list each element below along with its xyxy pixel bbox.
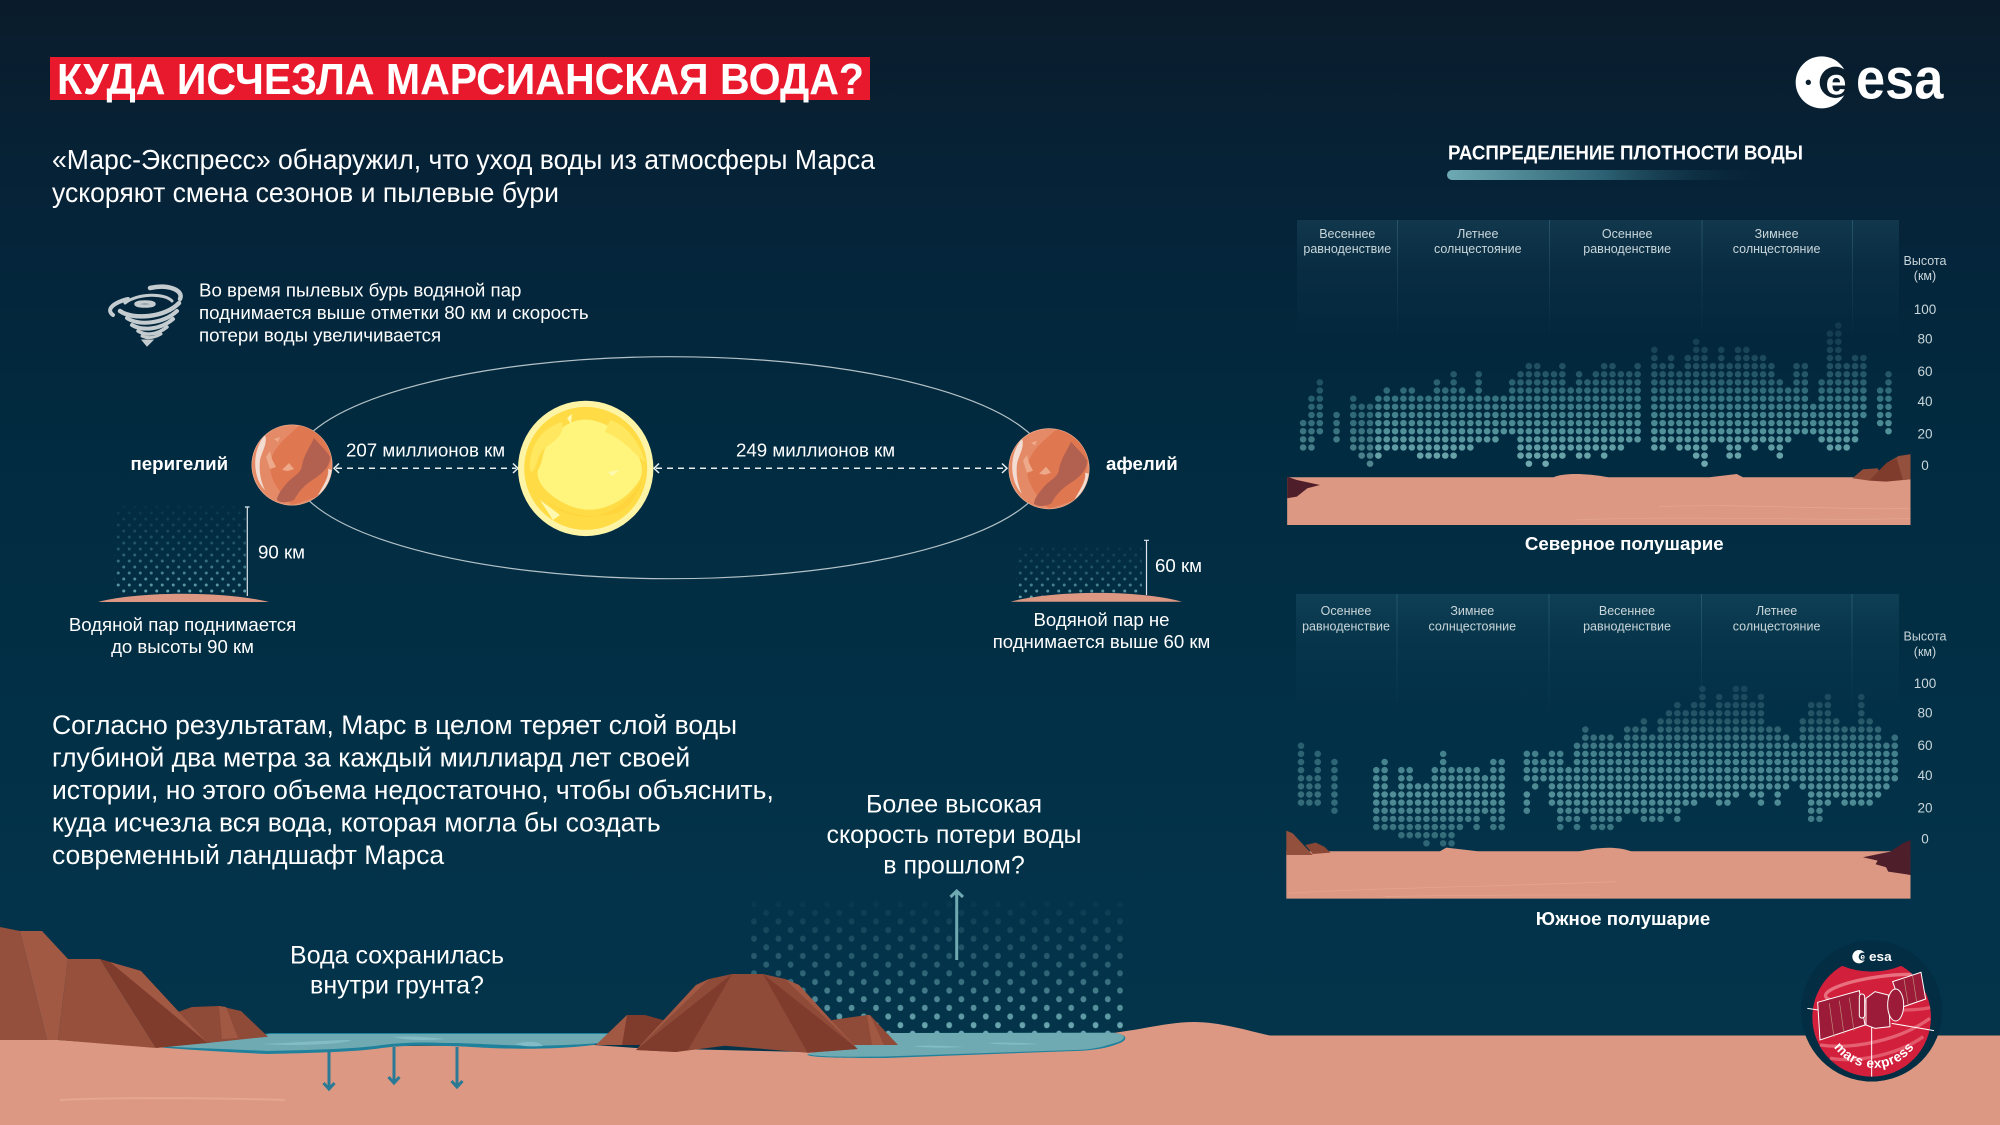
paragraph: куда исчезла вся вода, которая могла бы создать xyxy=(52,808,661,838)
season headers north xyxy=(1297,220,1899,340)
esa logo: esa xyxy=(1856,47,1944,111)
vapour cloud above lake xyxy=(751,910,1123,1034)
icon: dust storm xyxy=(110,287,181,346)
badge esa logo: e xyxy=(1860,952,1865,962)
season headers south xyxy=(1296,594,1899,714)
paragraph: глубиной два метра за каждый миллиард лет своей xyxy=(52,742,690,772)
dot matrix south xyxy=(1301,689,1895,843)
season headers north: Осеннее xyxy=(1602,227,1653,241)
season headers south: Летнее xyxy=(1756,604,1797,618)
badge esa logo: esa xyxy=(1869,950,1893,964)
lake: right xyxy=(807,1033,1125,1058)
chart heading: РАСПРЕДЕЛЕНИЕ ПЛОТНОСТИ ВОДЫ xyxy=(1448,142,1803,164)
storm text: потери воды увеличивается xyxy=(199,324,441,346)
esa logo xyxy=(1796,47,1944,111)
season headers south: солнцестояние xyxy=(1733,620,1820,634)
altitude axis south: 40 xyxy=(1917,768,1933,783)
altitude axis south: (км) xyxy=(1914,645,1936,659)
text: higher loss in the past: в прошлом? xyxy=(883,852,1025,880)
label: 60 km: 60 км xyxy=(1155,555,1202,576)
badge esa logo xyxy=(1852,950,1893,964)
distance label: 249: 249 миллионов км xyxy=(736,440,895,460)
orbit xyxy=(292,357,1048,579)
altitude axis north: 40 xyxy=(1917,394,1933,409)
text: higher loss in the past: скорость потери воды xyxy=(826,821,1082,849)
altitude axis north: 0 xyxy=(1921,458,1929,473)
water vapour: aphelion xyxy=(1011,540,1182,602)
rocks: left cliff xyxy=(0,927,268,1048)
altitude axis south: 20 xyxy=(1917,800,1933,816)
arrow: aphelion distance xyxy=(654,464,1007,473)
altitude axis south: 80 xyxy=(1917,706,1933,720)
surface landscape xyxy=(0,927,2000,1125)
subtitle: ускоряют смена сезонов и пылевые бури xyxy=(52,177,559,208)
distance label: 207: 207 миллионов км xyxy=(346,440,505,460)
text: higher loss in the past: Более высокая xyxy=(866,790,1042,818)
rocks: central mountain xyxy=(596,974,898,1053)
altitude axis north: 80 xyxy=(1917,332,1933,346)
season headers north: Летнее xyxy=(1457,227,1498,241)
text: water stored in ground: Вода сохранилась xyxy=(290,942,504,970)
icon: mars at aphelion xyxy=(1008,428,1090,509)
altitude axis south: 0 xyxy=(1921,832,1929,846)
altitude axis north: (км) xyxy=(1914,269,1936,283)
label south: Южное полушарие xyxy=(1536,908,1710,929)
caption: perihelion vapour: Водяной пар поднимается xyxy=(69,614,296,635)
panel: southern hemisphere chart xyxy=(1286,594,1947,929)
altitude axis north xyxy=(1904,254,1947,473)
chart heading xyxy=(1447,142,1803,180)
season headers south: солнцестояние xyxy=(1428,620,1516,634)
altitude axis south: Высота xyxy=(1904,630,1947,644)
mission badge: mars express xyxy=(1802,942,1942,1082)
altitude axis north: 100 xyxy=(1914,302,1936,317)
arrow: perihelion distance xyxy=(334,464,518,473)
text: water stored in ground: внутри грунта? xyxy=(310,972,484,1000)
altitude axis north: 60 xyxy=(1917,364,1933,379)
season headers north: Весеннее xyxy=(1319,227,1375,241)
altitude axis north: 20 xyxy=(1917,426,1933,442)
season headers south: Осеннее xyxy=(1321,604,1371,618)
season headers south: равноденствие xyxy=(1302,620,1390,634)
spacecraft xyxy=(1807,972,1934,1077)
paragraph: современный ландшафт Марса xyxy=(52,840,444,870)
paragraph: истории, но этого объема недостаточно, чтобы объяснить, xyxy=(52,775,774,805)
water vapour: perihelion xyxy=(98,503,269,602)
season headers south: Весеннее xyxy=(1599,604,1655,618)
caption: aphelion vapour: Водяной пар не xyxy=(1034,609,1169,630)
lake: left xyxy=(156,1033,625,1054)
surface south xyxy=(1286,831,1911,899)
arrows: seepage xyxy=(324,1047,462,1089)
season headers north: равноденствие xyxy=(1583,242,1671,256)
altitude axis south: 60 xyxy=(1917,738,1933,753)
caption: perihelion vapour: до высоты 90 км xyxy=(111,636,254,657)
ground xyxy=(0,1022,2000,1125)
season headers north: солнцестояние xyxy=(1434,242,1522,256)
surface north xyxy=(1287,454,1911,525)
icon: mars at perihelion xyxy=(252,424,332,506)
dot matrix north xyxy=(1303,325,1889,464)
esa logo: e xyxy=(1826,61,1846,103)
season headers north: Зимнее xyxy=(1755,227,1799,241)
badge text: mars express xyxy=(1834,1043,1913,1070)
subtitle xyxy=(52,144,876,208)
subtitle: «Марс-Экспресс» обнаружил, что уход воды из атмосферы Марса xyxy=(52,144,876,175)
caption: aphelion vapour: поднимается выше 60 км xyxy=(993,631,1210,652)
season headers south: Зимнее xyxy=(1450,604,1494,618)
paragraph: Согласно результатам, Марс в целом теряет слой воды xyxy=(52,710,737,740)
icon: sun xyxy=(518,401,653,536)
panel: northern hemisphere chart xyxy=(1287,220,1947,554)
storm text: Во время пылевых бурь водяной пар xyxy=(199,280,521,300)
season headers south: равноденствие xyxy=(1583,620,1671,634)
altitude axis south xyxy=(1904,630,1947,846)
storm text: поднимается выше отметки 80 км и скорость xyxy=(199,302,589,323)
altitude axis north: Высота xyxy=(1904,254,1947,268)
season headers north: солнцестояние xyxy=(1733,242,1820,256)
label: perihelion: перигелий xyxy=(130,453,228,474)
title: КУДА ИСЧЕЗЛА МАРСИАНСКАЯ ВОДА? xyxy=(57,56,864,104)
label: aphelion: афелий xyxy=(1106,453,1178,474)
label: 90 km: 90 км xyxy=(258,542,305,562)
arrow: water escaping upward xyxy=(950,891,963,960)
altitude axis south: 100 xyxy=(1914,676,1936,691)
label north: Северное полушарие xyxy=(1525,533,1724,554)
season headers north: равноденствие xyxy=(1303,242,1391,256)
